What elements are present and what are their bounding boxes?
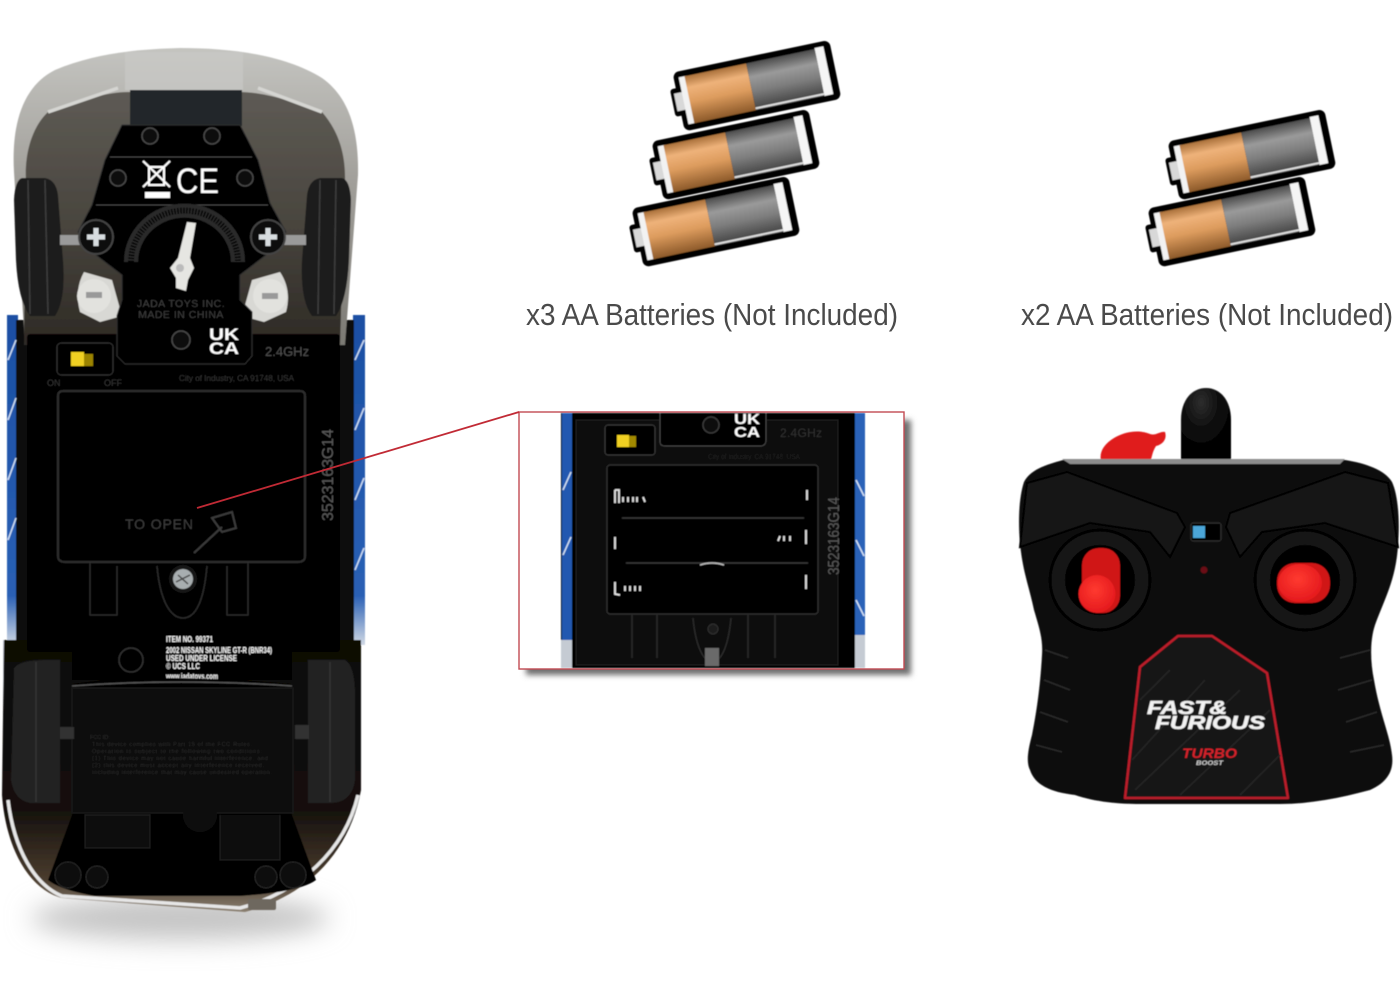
rear body <box>2 640 361 912</box>
item information: ITEM NO. 99371 <box>166 635 213 644</box>
red trigger <box>1101 431 1166 462</box>
callout border <box>519 412 904 669</box>
label: car batteries: x3 AA Batteries (Not Included) <box>526 297 898 332</box>
UKCA mark: CA <box>209 339 239 358</box>
key icon <box>194 512 236 553</box>
address text: City of Industry, CA 91748, USA <box>179 374 295 383</box>
callout leader line <box>197 412 519 508</box>
rear wheels <box>11 660 355 803</box>
item information: © UCS LLC <box>166 662 200 671</box>
item information: USED UNDER LICENSE <box>166 654 238 663</box>
LED <box>1200 566 1208 574</box>
callout address: City of Industry, CA 91748, USA <box>708 454 800 461</box>
maker text: JADA TOYS INC. <box>137 298 225 310</box>
power switch: OFF <box>104 378 122 388</box>
callout shadow <box>526 420 911 675</box>
shoulder panels <box>1020 472 1185 557</box>
FCC notice: (2) this device must accept any interference received, <box>92 763 264 769</box>
logo badge <box>1125 636 1288 798</box>
battery cover <box>58 391 305 618</box>
grip ridges <box>1036 650 1384 752</box>
side stripes <box>3 315 365 800</box>
power switch <box>47 343 122 388</box>
plate screws <box>110 128 253 349</box>
front wheels <box>14 178 351 316</box>
item information: 2002 NISSAN SKYLINE GT-R (BNR34) <box>166 646 272 655</box>
Turbo Boost logo: BOOST <box>1196 761 1225 767</box>
rear chassis <box>48 678 316 910</box>
FCC notice: (1) This device may not cause harmful interference, and <box>92 756 268 762</box>
steering dial <box>131 211 238 291</box>
Fast and Furious logo: FAST& <box>1147 698 1227 718</box>
mode switch <box>1191 523 1221 541</box>
axle screws with crosses <box>79 220 285 254</box>
cover screw <box>169 565 197 593</box>
to open label: TO OPEN <box>125 516 193 532</box>
FCC notice: Operation is subject to the following two conditions: <box>92 749 262 755</box>
Fast and Furious logo <box>1147 698 1265 733</box>
Turbo Boost logo <box>1182 745 1237 767</box>
panel: remote controller <box>1019 388 1399 804</box>
car ground shadow <box>30 896 330 940</box>
controller body <box>1019 460 1399 804</box>
steering clips <box>78 272 122 322</box>
callout background <box>519 412 904 669</box>
callout UKCA: CA <box>734 424 760 441</box>
right stick <box>1255 530 1355 630</box>
Fast and Furious logo: FURIOUS <box>1155 713 1265 733</box>
FCC notice: This device complies with Part 15 of the FCC Rules. <box>92 742 252 748</box>
callout car section <box>561 411 865 668</box>
item information: www.jadatoys.com <box>165 672 218 681</box>
FCC notice <box>90 735 272 776</box>
item information <box>165 635 272 681</box>
CE mark: CE <box>176 162 219 201</box>
battery terminals <box>615 490 807 595</box>
part number: 3523163G14 <box>320 429 337 521</box>
callout part number: 3523163G14 <box>826 497 843 575</box>
front plate: MADE IN CHINA <box>138 309 224 321</box>
UKCA mark: UK <box>209 325 240 344</box>
FCC notice: including interference that may cause undesired operation. <box>92 770 272 776</box>
callout frequency: 2.4GHz <box>780 426 822 440</box>
front translucent bumper <box>14 48 358 345</box>
icon: two AA batteries <box>1142 109 1336 269</box>
FCC notice: FCC ID: <box>90 735 110 741</box>
left stick <box>1050 530 1150 630</box>
antenna <box>1181 388 1231 460</box>
panel: battery compartment callout <box>519 411 911 675</box>
power switch: ON <box>47 378 60 388</box>
frequency label: 2.4GHz <box>265 344 309 359</box>
chassis plate <box>27 334 340 680</box>
open battery compartment <box>607 465 818 666</box>
callout switch and plate <box>605 413 766 455</box>
icon: three AA batteries <box>626 40 841 269</box>
callout UKCA <box>734 411 760 441</box>
panel: car underside <box>2 48 365 912</box>
WEEE symbol <box>143 161 170 198</box>
callout UKCA: UK <box>734 411 760 428</box>
front plate <box>77 125 288 364</box>
Turbo Boost logo: TURBO <box>1182 745 1237 761</box>
UKCA mark <box>209 325 240 358</box>
